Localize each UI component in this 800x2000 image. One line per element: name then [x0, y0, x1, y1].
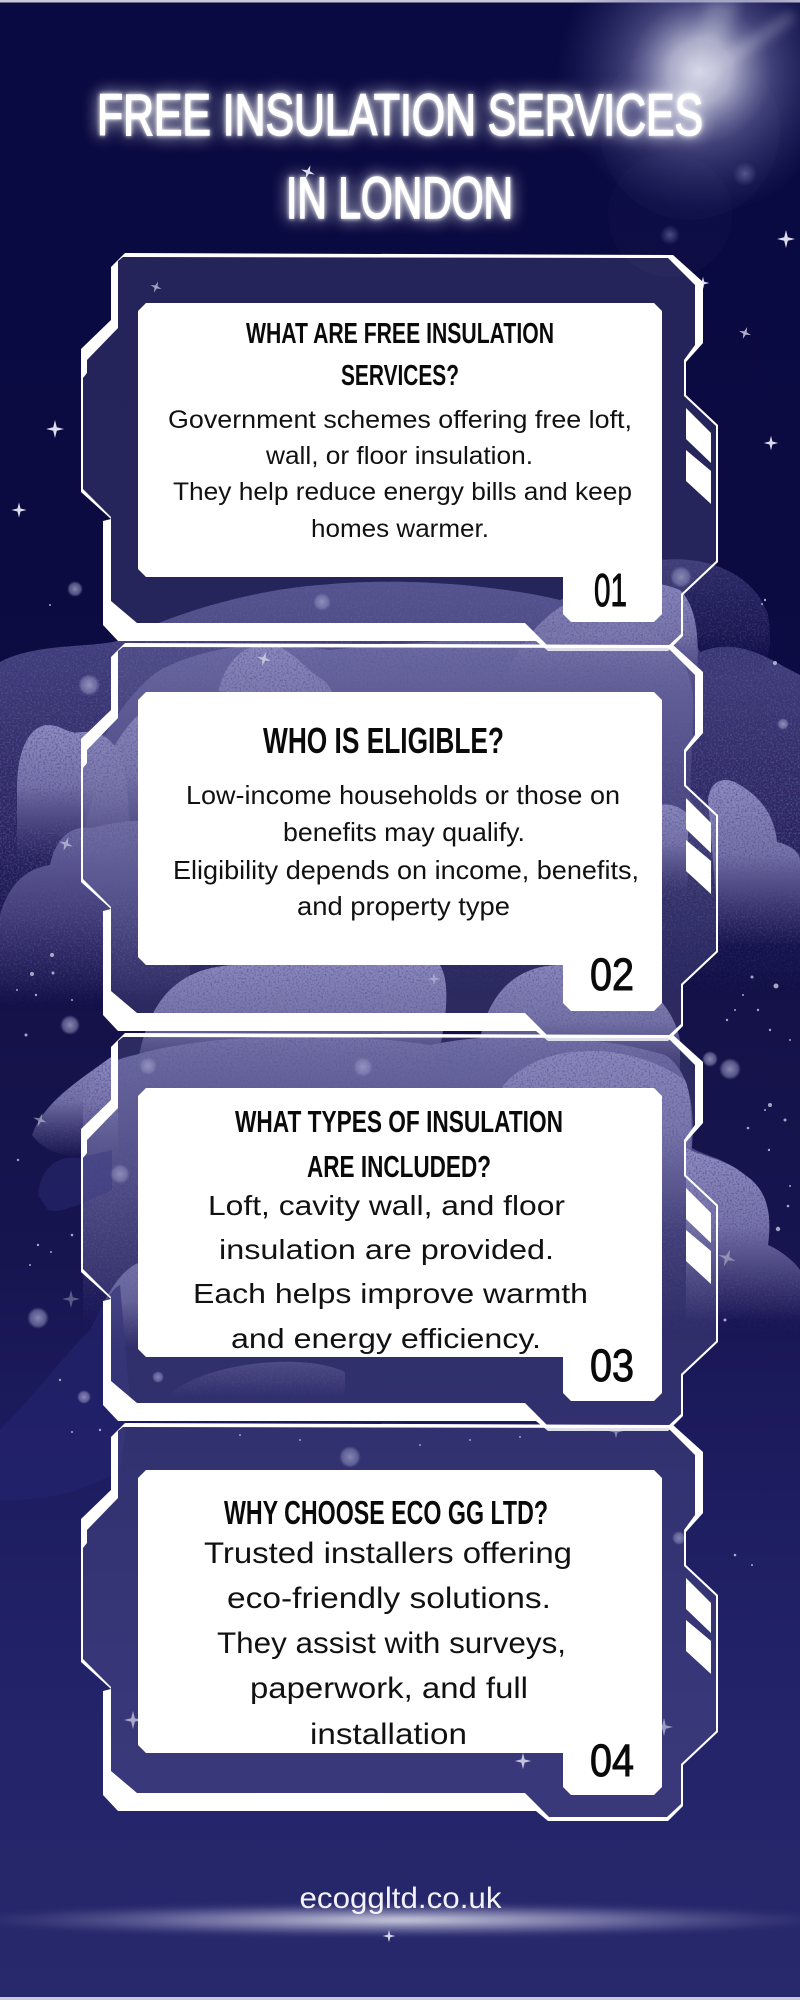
panel 4: why choose eco gg ltd — [81, 1423, 718, 1821]
footer url: ecoggltd.co.uk — [300, 1882, 503, 1915]
panel 3 heading — [235, 1104, 563, 1184]
panel 2 body text — [173, 780, 639, 921]
panel 2: who is eligible — [81, 643, 718, 1041]
panel 3 body text — [193, 1190, 588, 1354]
title: IN LONDON — [286, 166, 513, 231]
panel 3: what types of insulation — [81, 1033, 718, 1431]
panel 3 frame — [81, 1033, 718, 1431]
fuzzy star orbs — [27, 566, 789, 1545]
panel 4 body text: installation — [310, 1718, 467, 1751]
panel 2 body text: and property type — [297, 891, 510, 921]
panel 2 number: 02 — [590, 949, 634, 1000]
panel 1 body text: homes warmer. — [311, 515, 489, 543]
panel 3 heading: ARE INCLUDED? — [307, 1149, 491, 1184]
panel 4 body text: eco-friendly solutions. — [227, 1582, 551, 1615]
panel 2 heading: WHO IS ELIGIBLE? — [263, 720, 504, 761]
panel 1 number: 01 — [594, 564, 627, 616]
panel 4 body text: paperwork, and full — [250, 1672, 528, 1705]
panel 1 body text: Government schemes offering free loft, — [168, 406, 632, 434]
panel 2 body text: Eligibility depends on income, benefits, — [173, 855, 639, 885]
panel 1 body text: They help reduce energy bills and keep — [173, 478, 632, 506]
panel 1 body text: wall, or floor insulation. — [265, 442, 533, 470]
lower dark cloud lobes — [0, 1150, 130, 1500]
panel 1 frame — [81, 253, 718, 651]
panel 1: what are free insulation services — [81, 253, 718, 651]
title — [97, 83, 703, 231]
panel 4 body text: They assist with surveys, — [217, 1627, 566, 1660]
panel 2 card — [138, 692, 662, 1011]
panel 3 body text: insulation are provided. — [219, 1234, 554, 1265]
panel 3 body text: Loft, cavity wall, and floor — [208, 1190, 565, 1221]
tiny star specks — [16, 599, 791, 1566]
panel 1 heading — [246, 318, 554, 392]
panel 1 card — [138, 303, 662, 622]
panel 4 card — [138, 1470, 662, 1795]
panel 2 body text: Low-income households or those on — [186, 780, 620, 810]
footer glow band — [0, 1903, 800, 1937]
top edge line — [0, 0, 800, 2]
panel 3 body text: Each helps improve warmth — [193, 1278, 588, 1309]
panel 4 body text — [204, 1537, 572, 1751]
panel 1 body text — [168, 406, 632, 543]
panel 3 card — [138, 1088, 662, 1401]
star over title — [299, 163, 317, 181]
panel 4 frame — [81, 1423, 718, 1821]
panel 3 body text: and energy efficiency. — [231, 1323, 541, 1354]
bottom edge line — [0, 1997, 800, 2000]
panel 2 frame — [81, 643, 718, 1041]
panel 4 heading: WHY CHOOSE ECO GG LTD? — [224, 1494, 548, 1531]
panel 3 heading: WHAT TYPES OF INSULATION — [235, 1104, 563, 1139]
sun flare — [555, 0, 800, 277]
nebula clouds — [0, 559, 800, 1400]
panel 1 heading: WHAT ARE FREE INSULATION — [246, 318, 554, 350]
panel 1 heading: SERVICES? — [341, 360, 459, 392]
panel 4 body text: Trusted installers offering — [204, 1537, 572, 1570]
panel 2 body text: benefits may qualify. — [283, 817, 525, 847]
panel 4 number: 04 — [590, 1735, 634, 1786]
panel 3 number: 03 — [590, 1340, 634, 1391]
